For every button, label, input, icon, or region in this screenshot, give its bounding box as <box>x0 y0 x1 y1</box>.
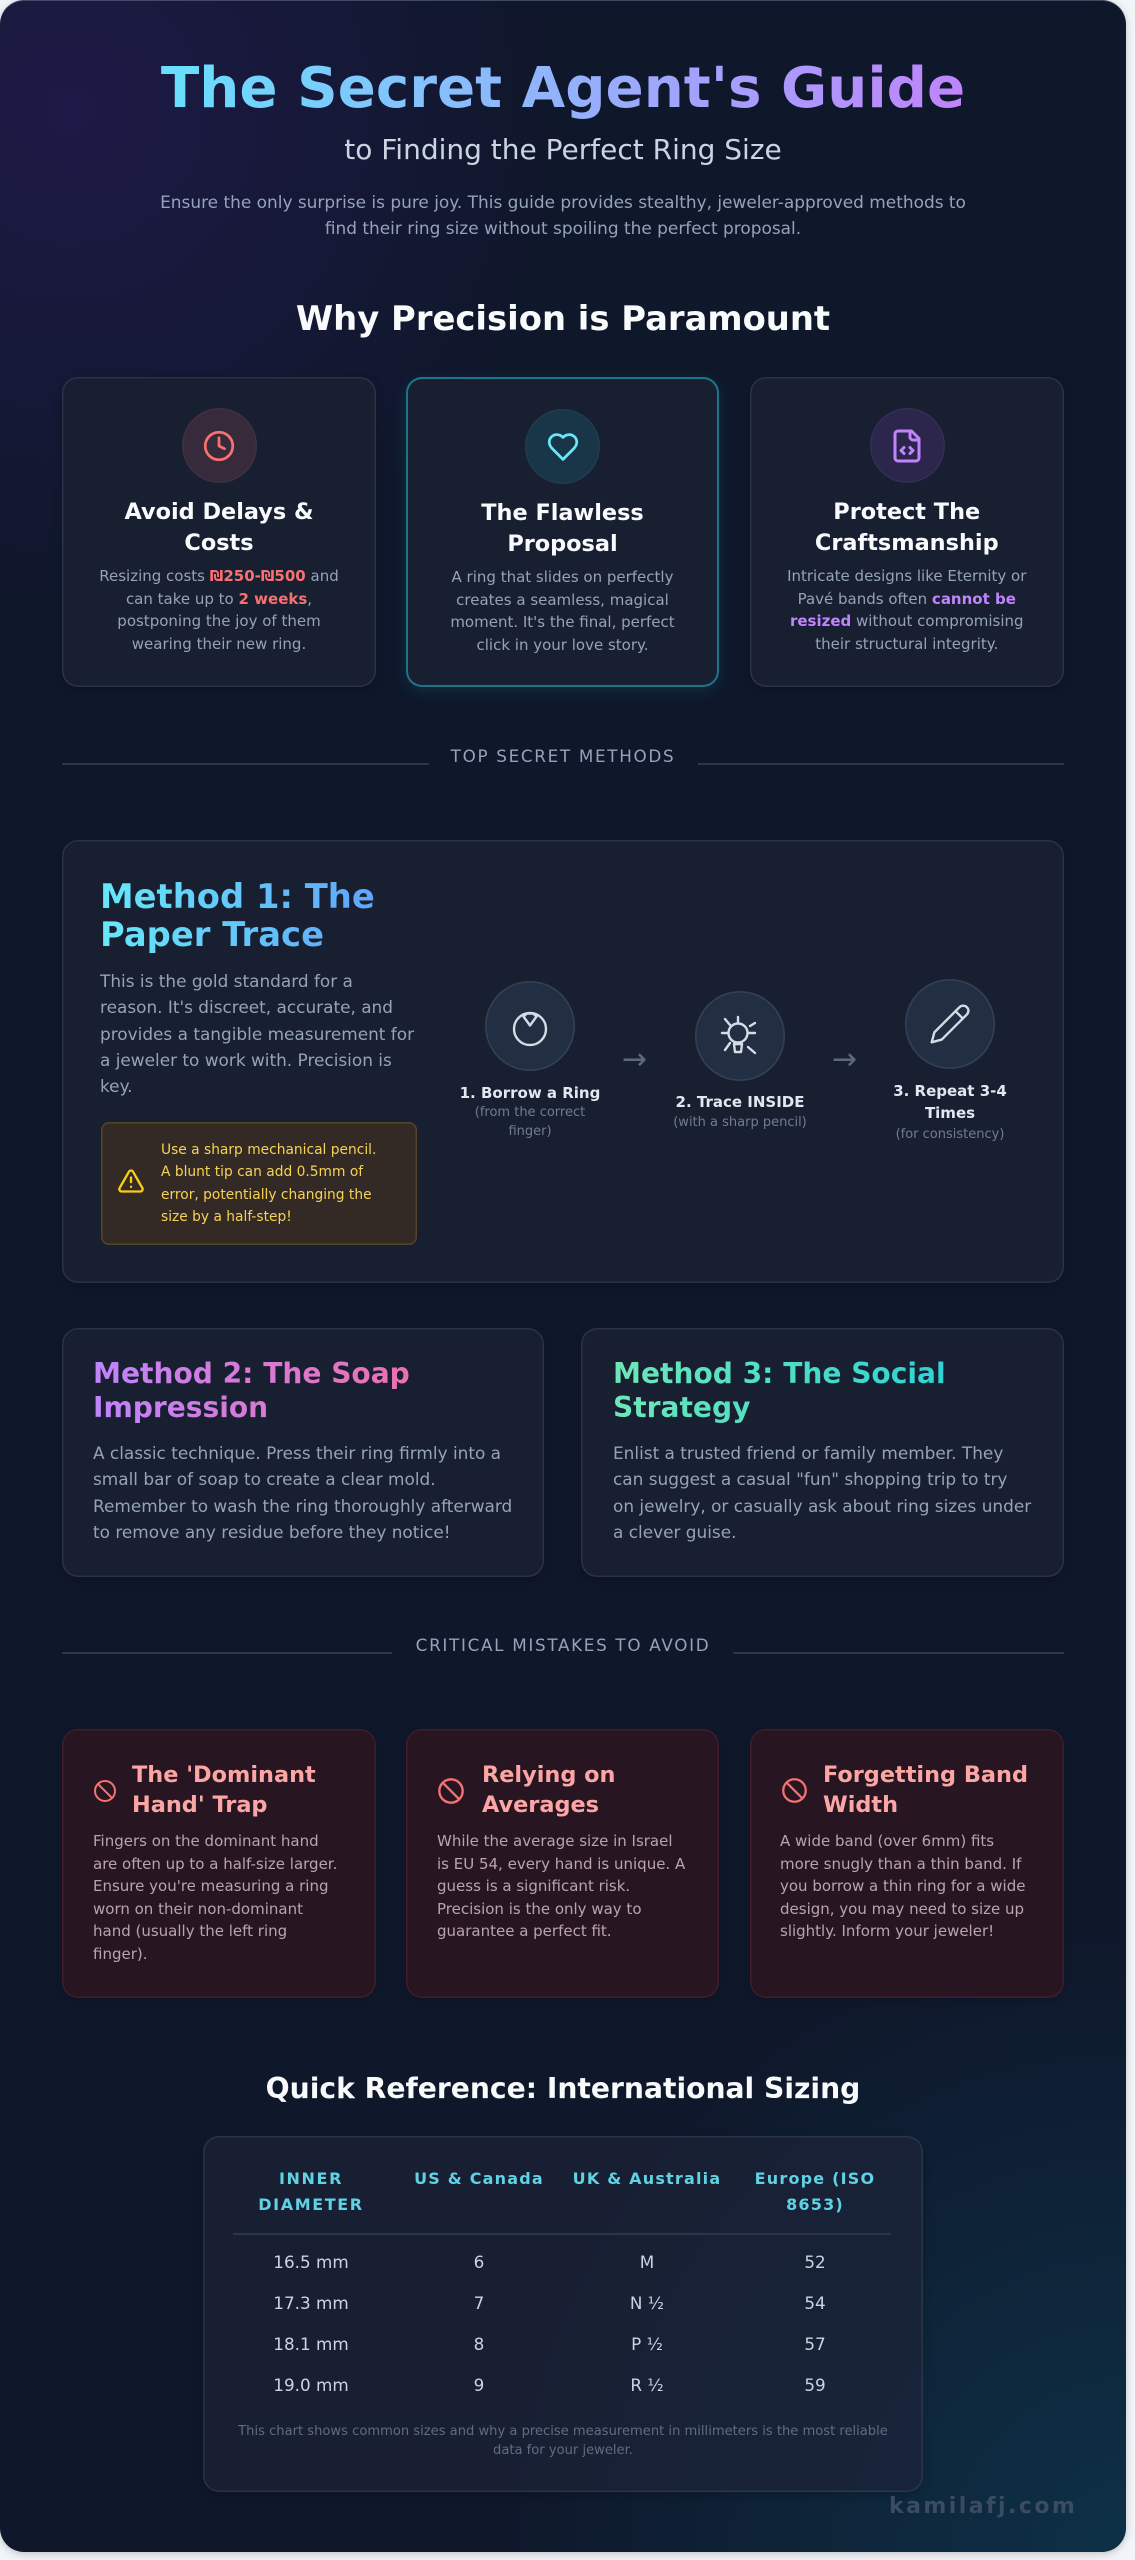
mistake text: Fingers on the dominant hand <box>93 1832 319 1850</box>
table row: 17.3 mm: 7 <box>474 2293 484 2313</box>
mistake text: guarantee a perfect fit. <box>437 1922 612 1940</box>
table footnote: This chart shows common sizes and why a precise measurement in millimeters is the most reliable <box>238 2424 888 2439</box>
card heading: Costs <box>184 530 254 556</box>
table row: 17.3 mm <box>273 2293 826 2313</box>
method 3 text <box>613 1443 1032 1542</box>
step note: (from the correct <box>475 1105 585 1120</box>
method 1 heading <box>100 877 375 954</box>
method 3 text: on jewelry, or casually ask about ring sizes under <box>613 1496 1031 1516</box>
mistake text: finger). <box>93 1945 148 1963</box>
card text: Intricate designs like Eternity or <box>787 567 1026 585</box>
method 1 text: a jeweler to work with. Precision is <box>100 1050 392 1070</box>
card heading: Craftsmanship <box>815 530 999 556</box>
step label <box>893 1082 1007 1122</box>
step label: 3. Repeat 3-4 <box>893 1082 1007 1100</box>
method 2 text <box>93 1443 512 1542</box>
heading: why precision: Why Precision is Paramount <box>296 299 830 338</box>
icon: clock <box>182 408 256 483</box>
method 1 text: provides a tangible measurement for <box>100 1024 414 1044</box>
method 1 text: key. <box>100 1076 133 1096</box>
table row: 19.0 mm: 19.0 mm <box>273 2375 349 2395</box>
step 3: repeat <box>893 979 1007 1142</box>
method 1 text: This is the gold standard for a <box>100 971 353 991</box>
panel: sizing table <box>203 2136 923 2492</box>
arrow: → <box>832 1042 857 1077</box>
panel: the flawless proposal <box>406 377 719 687</box>
mistake heading: The 'Dominant <box>132 1762 316 1788</box>
mistake text: is EU 54, every hand is unique. A <box>437 1855 685 1873</box>
icon: ban <box>782 1778 807 1803</box>
callout text: size by a half-step! <box>161 1209 292 1225</box>
divider: critical mistakes: CRITICAL MISTAKES TO AVOID <box>416 1635 710 1655</box>
method 1 text <box>100 971 414 1096</box>
card text <box>99 567 339 652</box>
method 2 text: A classic technique. Press their ring firmly into a <box>93 1443 501 1463</box>
table row: 17.3 mm: 54 <box>804 2293 826 2313</box>
method 2 text: small bar of soap to create a clear mold. <box>93 1469 436 1489</box>
table footnote: data for your jeweler. <box>493 2443 633 2458</box>
mistake heading <box>482 1762 615 1818</box>
step label: 2. Trace INSIDE <box>676 1093 804 1111</box>
table footnote <box>238 2424 888 2458</box>
heading: quick reference: Quick Reference: International Sizing <box>266 2072 860 2105</box>
card text: wearing their new ring. <box>132 634 306 652</box>
step label: Times <box>925 1104 975 1122</box>
icon: heart <box>525 409 600 484</box>
card text: moment. It's the final, perfect <box>450 613 675 631</box>
step note: finger) <box>508 1124 552 1139</box>
table row: 17.3 mm: N ½ <box>630 2293 664 2313</box>
method 3 heading: Strategy <box>613 1391 750 1424</box>
table header: INNER <box>279 2169 343 2188</box>
panel: method 2 <box>62 1328 544 1577</box>
table row: 16.5 mm: M <box>640 2252 654 2272</box>
panel: method 1 <box>62 840 1064 1283</box>
method 2 heading: Impression <box>93 1391 268 1424</box>
card heading: Protect The <box>833 499 980 525</box>
card heading <box>815 499 999 556</box>
mistake text: slightly. Inform your jeweler! <box>780 1922 994 1940</box>
method 1 heading: Paper Trace <box>100 915 324 954</box>
method 3 heading <box>613 1357 946 1424</box>
step label: 1. Borrow a Ring <box>460 1084 600 1102</box>
method 3 text: can suggest a casual "fun" shopping trip to try <box>613 1469 1007 1489</box>
arrow: → <box>622 1042 647 1077</box>
card text <box>450 568 675 654</box>
table row: 17.3 mm: 17.3 mm <box>273 2293 349 2313</box>
step 1: borrow a ring <box>460 981 600 1139</box>
method 2 text: Remember to wash the ring thoroughly afterward <box>93 1496 512 1516</box>
callout text: error, potentially changing the <box>161 1187 372 1203</box>
method 1 heading: Method 1: The <box>100 877 375 916</box>
table row: 19.0 mm <box>273 2375 826 2395</box>
method 1 text: reason. It's discreet, accurate, and <box>100 997 393 1017</box>
card heading <box>124 499 314 556</box>
card text <box>787 567 1026 652</box>
method 2 heading <box>93 1357 410 1424</box>
mistake heading <box>823 1762 1028 1818</box>
intro paragraph: Ensure the only surprise is pure joy. This guide provides stealthy, jeweler-approved methods to <box>160 192 966 212</box>
method 3 text: a clever guise. <box>613 1522 736 1542</box>
mistake text: Precision is the only way to <box>437 1900 642 1918</box>
card text: click in your love story. <box>476 636 648 654</box>
method 2 heading: Method 2: The Soap <box>93 1357 410 1390</box>
table header: US & Canada <box>414 2169 544 2188</box>
mistake text: more snugly than a thin band. If <box>780 1855 1021 1873</box>
table header: 8653) <box>786 2195 844 2214</box>
divider: top secret methods: TOP SECRET METHODS <box>451 746 675 766</box>
callout text: A blunt tip can add 0.5mm of <box>161 1164 363 1180</box>
mistake text <box>780 1832 1025 1940</box>
mistake heading: Hand' Trap <box>132 1792 267 1818</box>
table row: 16.5 mm: 16.5 mm <box>273 2252 349 2272</box>
watermark: kamilafj.com <box>889 2494 1077 2519</box>
mistake heading: Averages <box>482 1792 599 1818</box>
intro paragraph: find their ring size without spoiling the perfect proposal. <box>325 218 801 238</box>
card heading: Proposal <box>507 531 618 557</box>
callout text: Use a sharp mechanical pencil. <box>161 1142 376 1158</box>
panel: relying on averages <box>406 1729 719 1998</box>
panel: method 3 <box>581 1328 1064 1577</box>
card text: Resizing costs ₪250-₪500 and <box>99 567 339 585</box>
table header <box>258 2169 875 2214</box>
method 3 text: Enlist a trusted friend or family member. They <box>613 1443 1003 1463</box>
step note: (with a sharp pencil) <box>673 1115 807 1130</box>
callout text <box>161 1142 376 1225</box>
card heading: Avoid Delays & <box>124 499 314 525</box>
mistake text: design, you may need to size up <box>780 1900 1024 1918</box>
mistake text: Ensure you're measuring a ring <box>93 1877 328 1895</box>
card text: resized without compromising <box>790 612 1024 630</box>
panel: dominant hand trap <box>62 1729 376 1998</box>
card text: can take up to 2 weeks, <box>126 590 312 608</box>
table row: 18.1 mm: 57 <box>804 2334 826 2354</box>
table row: 18.1 mm <box>273 2334 826 2354</box>
mistake text: are often up to a half-size larger. <box>93 1855 337 1873</box>
title: The Secret Agent's Guide <box>161 56 965 121</box>
card text: A ring that slides on perfectly <box>452 568 673 586</box>
intro paragraph <box>160 192 966 238</box>
table row: 16.5 mm: 52 <box>804 2252 826 2272</box>
mistake text <box>437 1832 686 1940</box>
mistake heading: Width <box>823 1792 898 1818</box>
subtitle: to Finding the Perfect Ring Size <box>344 133 782 166</box>
table header: Europe (ISO <box>755 2169 875 2188</box>
icon: trace <box>695 991 785 1081</box>
card text: postponing the joy of them <box>117 612 321 630</box>
icon: file code <box>870 408 944 483</box>
callout: pencil tip <box>101 1122 417 1245</box>
method 3 heading: Method 3: The Social <box>613 1357 946 1390</box>
table row: 16.5 mm <box>273 2252 826 2272</box>
table row: 18.1 mm: 8 <box>474 2334 484 2354</box>
step note <box>475 1105 585 1139</box>
mistake text: worn on their non-dominant <box>93 1900 303 1918</box>
card heading <box>481 500 644 557</box>
card heading: The Flawless <box>481 500 644 526</box>
table row: 16.5 mm: 6 <box>474 2252 484 2272</box>
mistake text: guess is a significant risk. <box>437 1877 630 1895</box>
table row: 19.0 mm: 59 <box>804 2375 826 2395</box>
mistake text: While the average size in Israel <box>437 1832 673 1850</box>
icon: ban <box>438 1778 464 1804</box>
icon: ban <box>94 1780 116 1802</box>
card text: Pavé bands often cannot be <box>798 590 1016 608</box>
icon: warning triangle <box>118 1169 144 1193</box>
table header: DIAMETER <box>258 2195 364 2214</box>
table header: UK & Australia <box>573 2169 721 2188</box>
mistake heading <box>132 1762 316 1818</box>
icon: ring <box>485 981 575 1071</box>
icon: pencil <box>905 979 995 1069</box>
panel: avoid delays and costs <box>62 377 376 687</box>
table row: 19.0 mm: 9 <box>474 2375 484 2395</box>
panel: protect the craftsmanship <box>750 377 1064 687</box>
step 2: trace inside <box>673 991 807 1130</box>
mistake text: you borrow a thin ring for a wide <box>780 1877 1025 1895</box>
table row: 18.1 mm: P ½ <box>631 2334 663 2354</box>
panel: forgetting band width <box>750 1729 1064 1998</box>
table row: 18.1 mm: 18.1 mm <box>273 2334 349 2354</box>
mistake heading: Relying on <box>482 1762 615 1788</box>
card text: creates a seamless, magical <box>456 590 669 608</box>
table row: 19.0 mm: R ½ <box>630 2375 664 2395</box>
mistake text <box>93 1832 337 1963</box>
mistake heading: Forgetting Band <box>823 1762 1028 1788</box>
step note: (for consistency) <box>896 1127 1004 1142</box>
card text: their structural integrity. <box>815 634 998 652</box>
method 2 text: to remove any residue before they notice! <box>93 1522 451 1542</box>
mistake text: A wide band (over 6mm) fits <box>780 1832 994 1850</box>
mistake text: hand (usually the left ring <box>93 1922 287 1940</box>
